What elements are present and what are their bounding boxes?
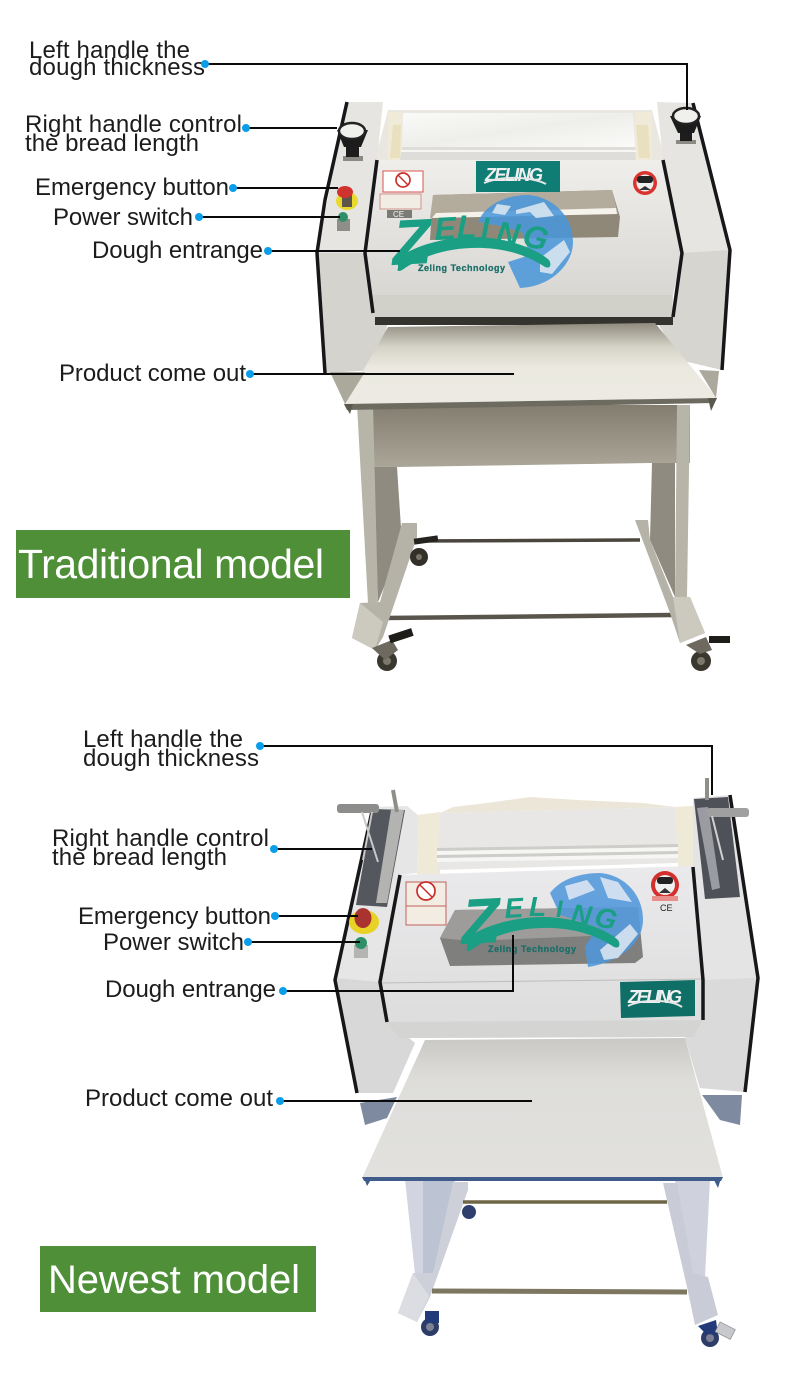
callout: dough entrange (newest): Dough entrange [105, 976, 276, 1003]
left adjustment handle [337, 790, 405, 907]
right adjustment handle [694, 778, 749, 899]
machine: traditional model [317, 102, 730, 671]
callout: left handle the dough thickness (newest): Left handle the [83, 726, 243, 753]
globe watermark [550, 873, 643, 967]
emergency button [349, 908, 379, 934]
callout: power switch (traditional): Power switch [53, 204, 193, 231]
warning sticker: CE [393, 210, 404, 219]
Zeling logo [388, 205, 552, 279]
callout: left handle the dough thickness (newest) [83, 726, 712, 795]
logo plate: ZELING [627, 987, 682, 1007]
callout: left handle the dough thickness (traditional): dough thickness [29, 54, 205, 81]
dial handle: right [670, 108, 701, 144]
Zeling logo [457, 884, 620, 958]
badge: traditional model [16, 530, 350, 598]
Zeling logo: L [457, 209, 477, 245]
globe watermark [478, 195, 573, 288]
Zeling logo: Z [457, 884, 505, 958]
callout: emergency button (traditional): Emergency button [35, 174, 229, 201]
hazard sign [651, 871, 679, 913]
Zeling logo: N [494, 214, 523, 253]
callout: power switch (newest): Power switch [103, 929, 244, 956]
badge: newest model: Newest model [48, 1258, 300, 1302]
callout: right handle control the bread length (traditional): Right handle control [25, 111, 242, 138]
stand: legs, feet, rods and casters [352, 405, 730, 671]
Zeling logo: I [481, 212, 490, 245]
callout: right handle control the bread length (newest): Right handle control [52, 825, 269, 852]
Zeling logo: E [504, 892, 525, 924]
callout: right handle control the bread length (newest): the bread length [52, 844, 227, 871]
callout: left handle the dough thickness (traditional): Left handle the [29, 37, 190, 64]
Zeling logo: N [569, 898, 594, 932]
callout: power switch (traditional) [53, 204, 340, 231]
logo plate: ZELING [484, 165, 543, 185]
emergency button [336, 186, 358, 210]
Zeling logo: E [433, 210, 458, 247]
badge: traditional model: Traditional model [18, 541, 324, 587]
callout: right handle control the bread length (traditional) [25, 111, 337, 157]
callout: product come out (traditional): Product come out [59, 360, 246, 387]
hopper [440, 907, 643, 966]
Zeling logo: G [592, 901, 620, 936]
callout: emergency button (newest) [78, 903, 358, 930]
callout: right handle control the bread length (newest) [52, 825, 372, 871]
callout: left handle the dough thickness (traditional) [29, 37, 687, 110]
power switch [337, 212, 350, 231]
hopper opening [430, 190, 620, 240]
Zeling logo: L [529, 891, 546, 922]
Zeling logo: I [556, 896, 564, 923]
dial handle: left [337, 123, 368, 161]
Zeling logo: G [519, 217, 552, 258]
callout: dough entrange (traditional): Dough entrange [92, 237, 263, 264]
callout: product come out (newest): Product come out [85, 1085, 273, 1112]
warning sticker [406, 882, 446, 925]
Zeling logo: Zeling Technology [418, 263, 505, 273]
callout: power switch (newest) [103, 929, 360, 956]
Zeling logo: Z [388, 205, 436, 279]
callout: right handle control the bread length (traditional): the bread length [25, 130, 199, 157]
Zeling logo: Zeling Technology [488, 944, 576, 954]
machine: newest model [335, 778, 758, 1347]
callout: emergency button (newest): Emergency button [78, 903, 271, 930]
machine body [317, 102, 730, 373]
hazard sign: CE [660, 903, 673, 913]
badge: newest model [40, 1246, 316, 1312]
callout: dough entrange (newest) [105, 935, 513, 1003]
hazard sign [633, 171, 657, 195]
warning sticker [380, 171, 423, 219]
callout: product come out (newest) [85, 1085, 532, 1112]
output table [362, 1038, 723, 1188]
callout: product come out (traditional) [59, 360, 514, 387]
callout: dough entrange (traditional) [92, 237, 400, 264]
logo plate [476, 161, 560, 192]
power switch [354, 937, 368, 958]
output tray [330, 323, 719, 414]
stand: legs, feet, rods and casters [398, 1178, 735, 1347]
logo plate [620, 980, 695, 1018]
callout: emergency button (traditional) [35, 174, 338, 201]
callout: left handle the dough thickness (newest): dough thickness [83, 745, 259, 772]
machine body [335, 795, 758, 1125]
